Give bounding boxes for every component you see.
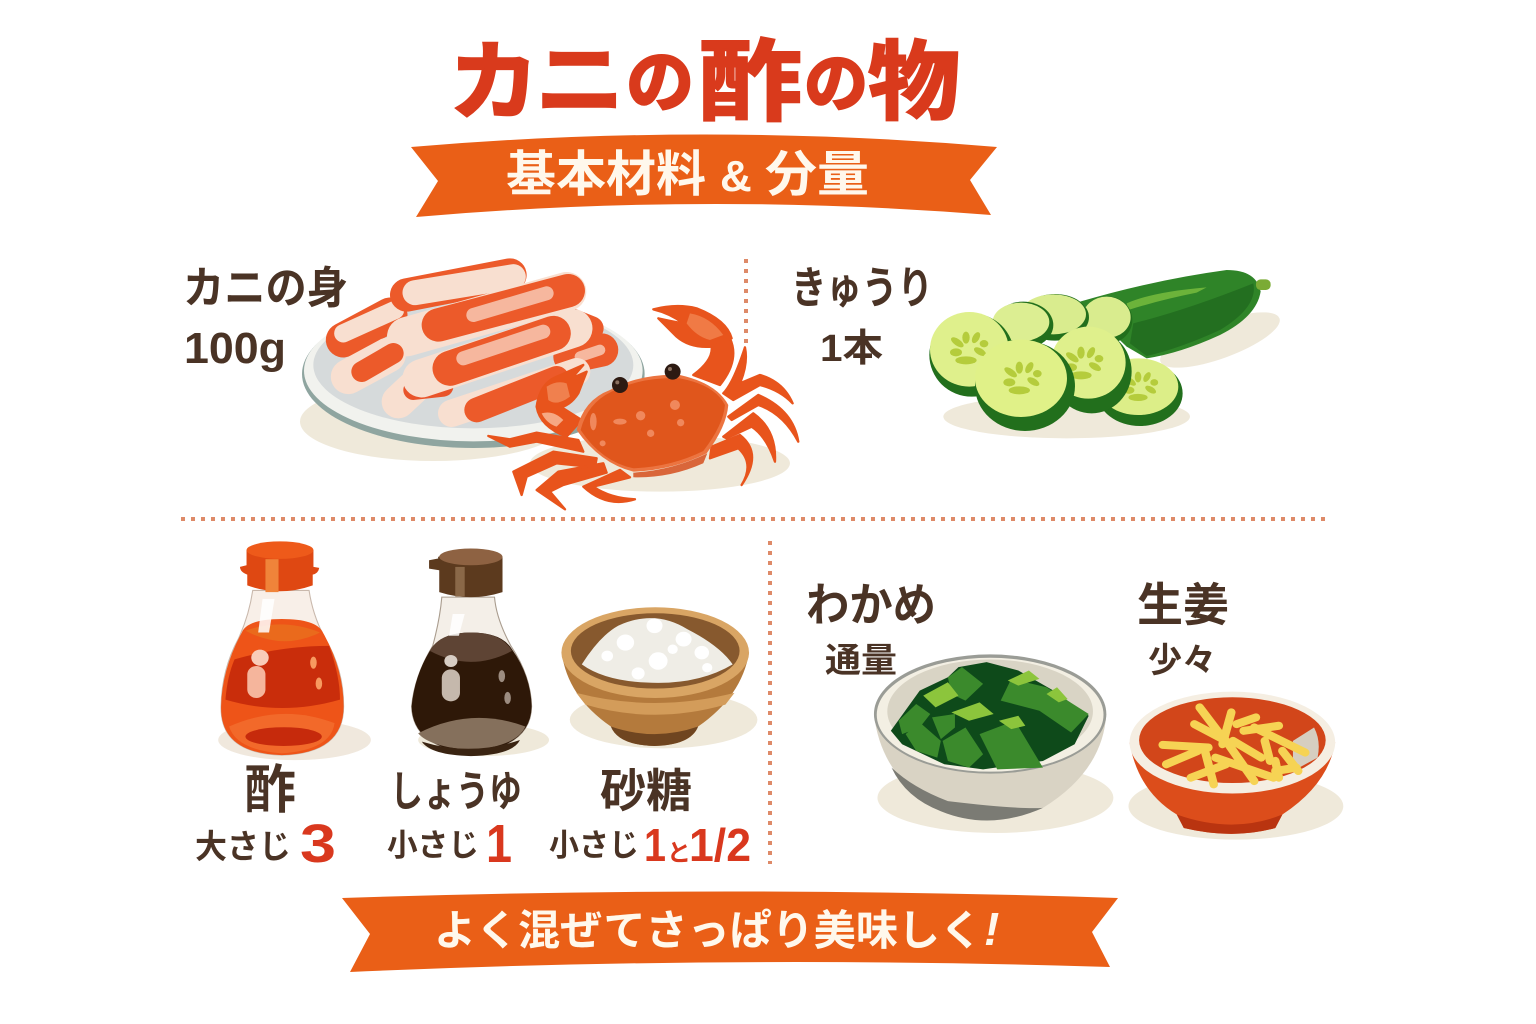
meat sticks — [343, 275, 602, 413]
banner: closing message: ! — [984, 903, 999, 955]
label: soy sauce: しょうゆ — [390, 768, 522, 815]
illustration: cucumber — [929, 270, 1286, 438]
label: sugar — [549, 765, 751, 871]
label: cucumber: 1本 — [820, 328, 883, 370]
title: 物 — [868, 35, 960, 131]
label: wakame — [806, 579, 936, 680]
label: vinegar: 大さじ — [195, 828, 291, 865]
label: sugar: 小さじ — [549, 828, 639, 863]
label: crab meat: カニの身 — [183, 264, 348, 313]
label: vinegar: 3 — [300, 814, 336, 874]
label: sugar: 1/2 — [689, 819, 751, 871]
label: cucumber: きゅうり — [791, 264, 933, 313]
banner: closing message: よく混ぜてさっぱり美味しく — [434, 907, 982, 954]
slices — [929, 294, 1183, 431]
illustration: wakame bowl — [874, 654, 1113, 833]
label: vinegar: 酢 — [244, 762, 296, 820]
label: sugar: 1 — [644, 819, 666, 871]
title: カ — [449, 35, 539, 131]
label: ginger: 生姜 — [1137, 579, 1229, 631]
label: crab meat: 100g — [184, 324, 286, 373]
banner: subtitle: 分量 — [765, 148, 869, 202]
title: ニ — [536, 34, 624, 128]
label: crab meat — [183, 264, 348, 373]
label: sugar: 砂糖 — [600, 765, 692, 817]
title: の — [626, 45, 694, 121]
banner: subtitle: 基本材料 — [506, 148, 706, 202]
label: cucumber — [791, 264, 933, 370]
label: ginger — [1137, 579, 1229, 680]
illustration: ginger bowl — [1129, 692, 1343, 840]
label: wakame: わかめ — [806, 579, 936, 631]
label: ginger: 少々 — [1148, 642, 1216, 680]
illustration: sugar bowl — [561, 607, 757, 748]
label: wakame: 通量 — [825, 642, 897, 680]
label: soy sauce: 小さじ — [387, 828, 479, 863]
illustration: soy sauce bottle — [412, 548, 549, 756]
title — [449, 33, 960, 132]
dividers — [181, 259, 1325, 864]
illustration: crab — [488, 306, 798, 509]
label: soy sauce — [387, 768, 522, 874]
banner: subtitle — [411, 134, 997, 217]
title: 酢 — [698, 33, 802, 132]
label: soy sauce: 1 — [486, 814, 512, 874]
banner: closing message — [342, 892, 1118, 972]
label: vinegar — [195, 762, 336, 874]
label: sugar: と — [667, 840, 691, 867]
illustration: plate of crab meat — [300, 275, 645, 461]
banner: subtitle: & — [720, 152, 752, 201]
illustration: vinegar bottle — [218, 541, 371, 760]
title: の — [804, 48, 868, 120]
